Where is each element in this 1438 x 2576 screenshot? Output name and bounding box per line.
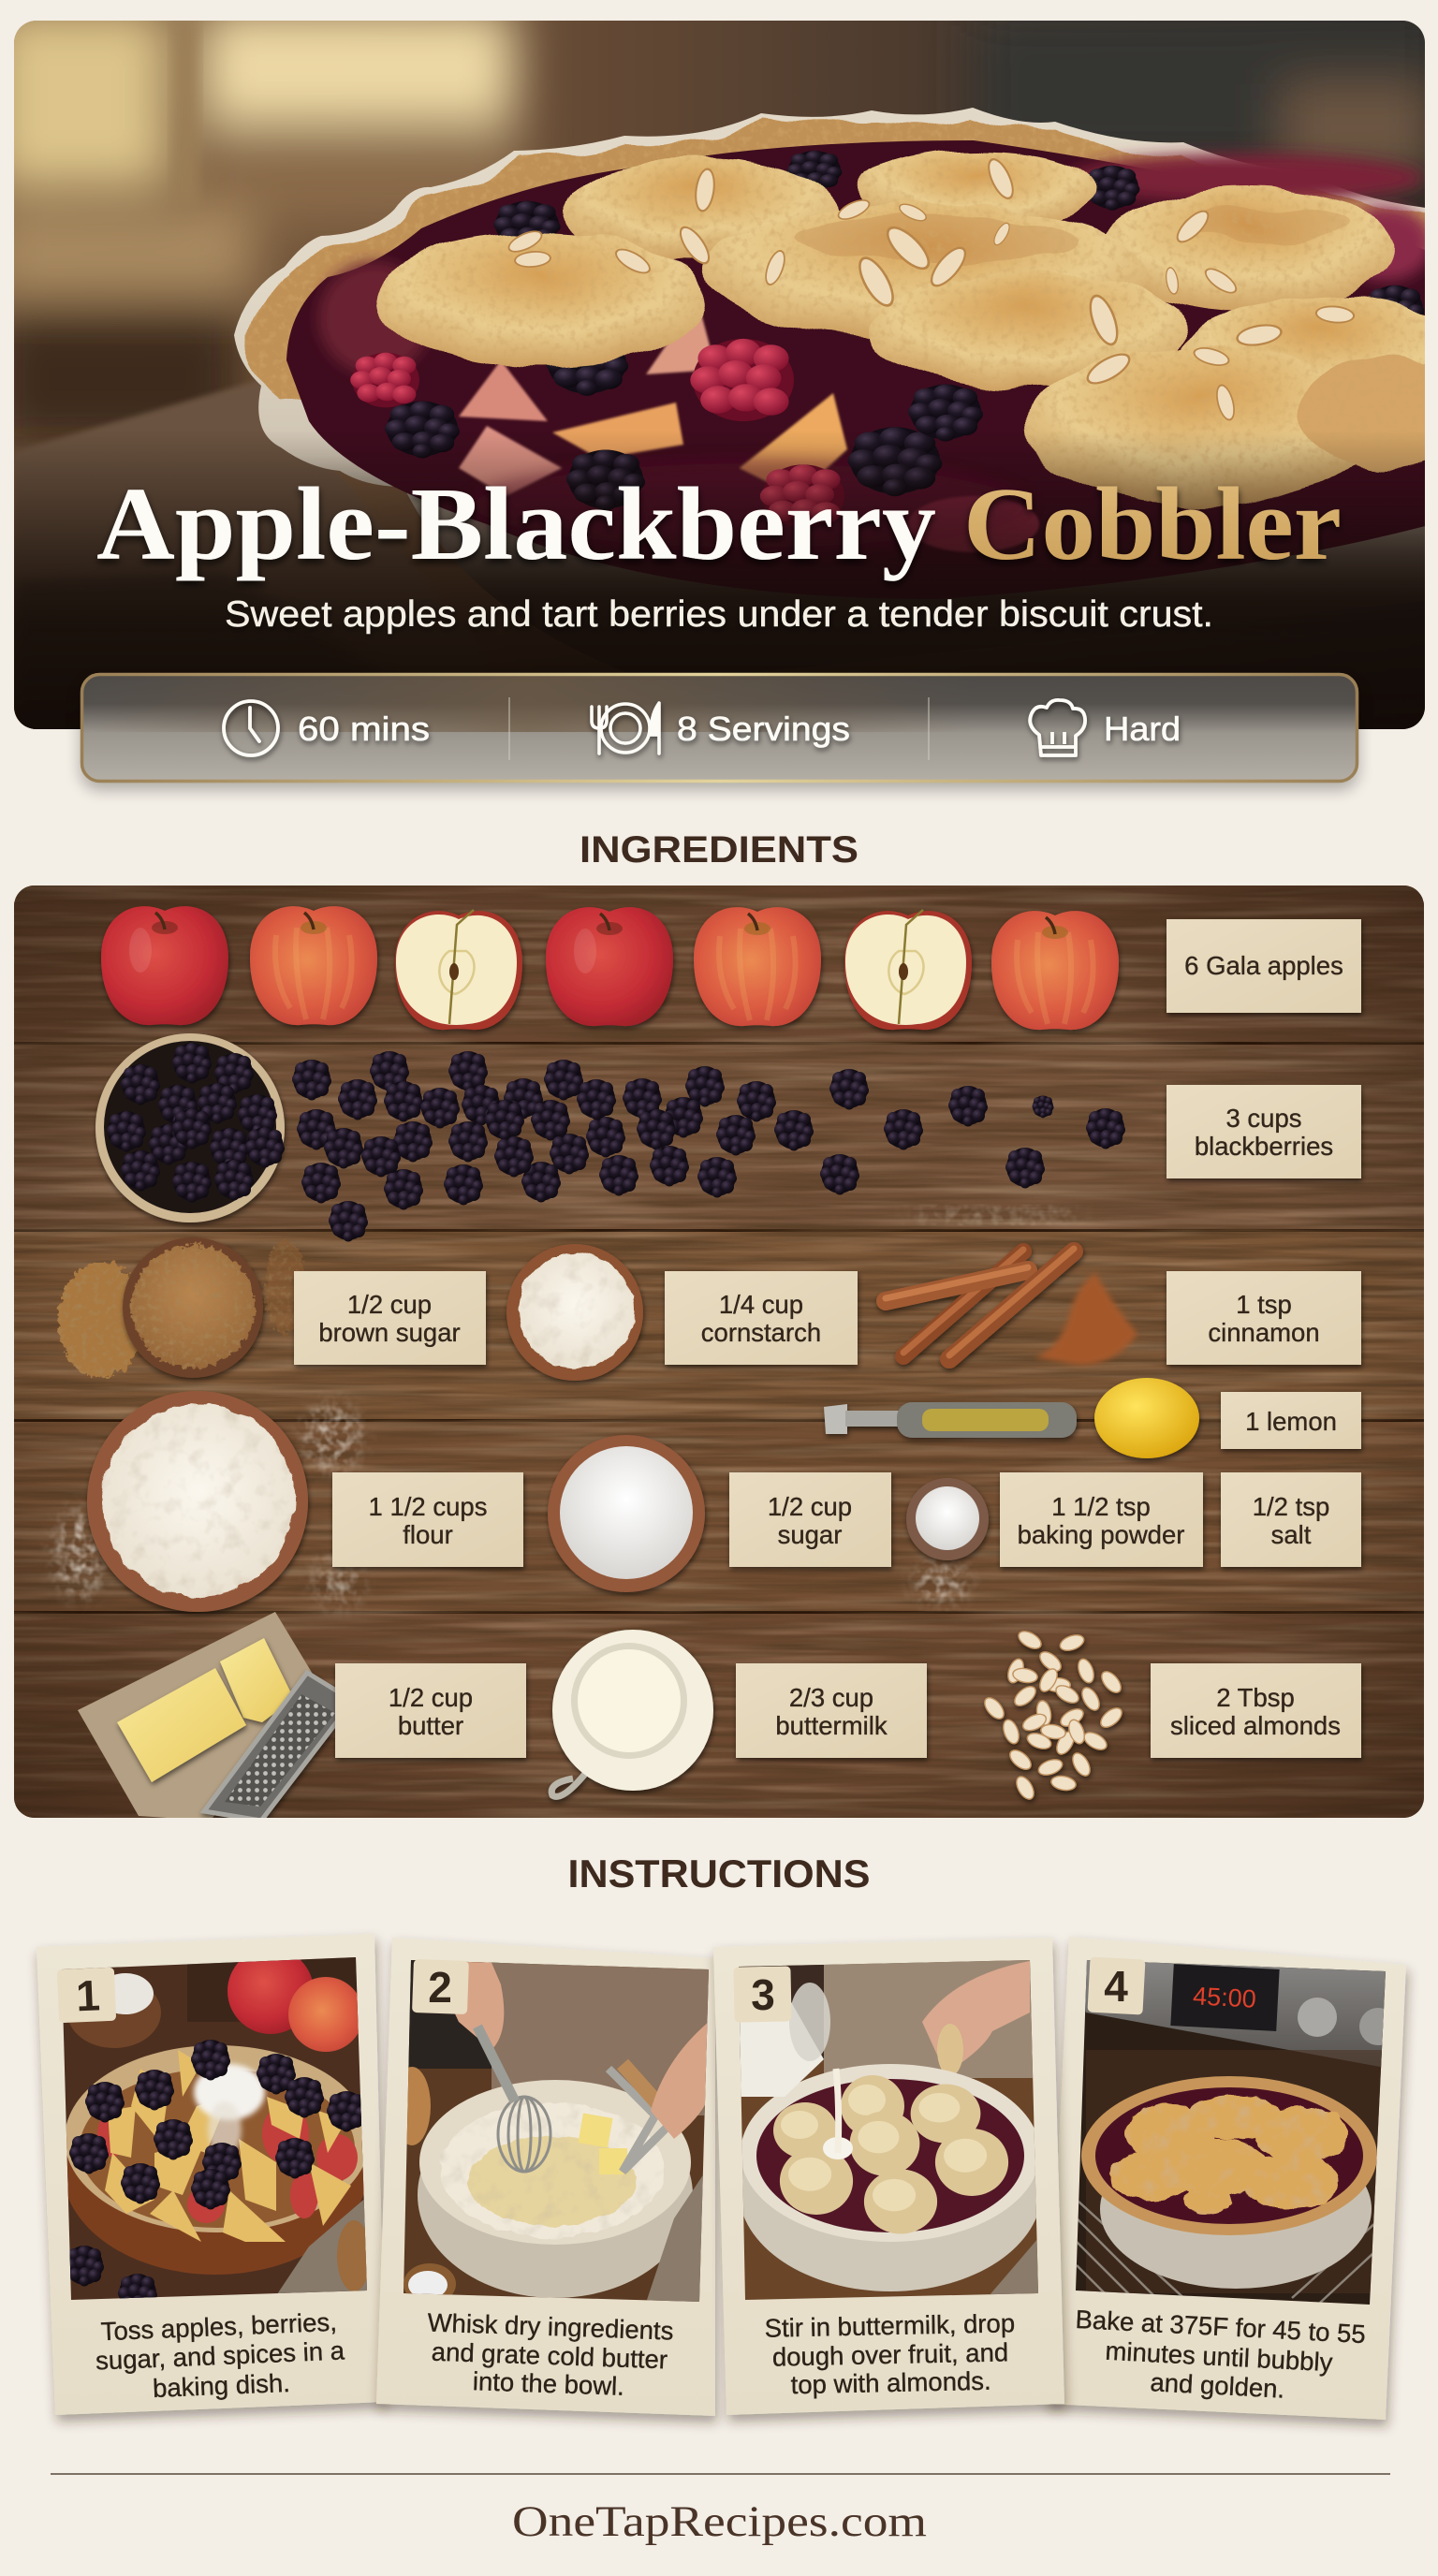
bowl of brown sugar [58, 1237, 306, 1378]
label: baking powder: baking powder [1018, 1520, 1184, 1549]
label: butter: 1/2 cup [389, 1683, 473, 1712]
label: lemon: 1 lemon [1245, 1407, 1337, 1436]
card 4 paper [1046, 1937, 1406, 2420]
label: cornstarch: cornstarch [701, 1318, 821, 1347]
step 3 text [764, 2308, 1017, 2400]
label: flour: flour [403, 1520, 453, 1549]
label: blackberries [1167, 1085, 1361, 1178]
label: baking powder [1000, 1472, 1203, 1567]
label: salt: 1/2 tsp [1253, 1492, 1329, 1521]
label: sugar: sugar [778, 1520, 842, 1549]
title: Apple-Blackberry [96, 467, 936, 582]
icon: plate and cutlery [592, 703, 659, 754]
step 4 text [1072, 2305, 1366, 2408]
sliced almonds [980, 1627, 1126, 1803]
scattered blackberries [292, 1051, 1125, 1241]
label: cinnamon: 1 tsp [1236, 1290, 1292, 1319]
card 1 paper [37, 1934, 386, 2415]
label: almonds: 2 Tbsp [1216, 1683, 1295, 1712]
title [96, 467, 1342, 582]
bowl of blackberries [95, 1033, 285, 1222]
label: sugar [729, 1472, 891, 1567]
card 2 paper [376, 1938, 715, 2416]
heading: instructions: INSTRUCTIONS [567, 1852, 871, 1895]
lemon [1094, 1378, 1199, 1458]
label: buttermilk [736, 1663, 927, 1758]
footer website: OneTapRecipes.com [512, 2497, 927, 2546]
step 1 text: baking dish. [152, 2368, 290, 2403]
label: baking powder: 1 1/2 tsp [1051, 1492, 1151, 1521]
step 3 photo [730, 1956, 1049, 2303]
step 2 text [425, 2307, 674, 2403]
title: Cobbler [963, 467, 1342, 582]
label: lemon [1221, 1392, 1361, 1449]
label: blackberries: 3 cups [1225, 1104, 1302, 1133]
step 4 number tab [1087, 1957, 1145, 2015]
step 2 photo [393, 1952, 716, 2307]
step 2 number tab: 2 [428, 1963, 452, 2012]
label: cinnamon [1167, 1271, 1361, 1365]
subtitle: Sweet apples and tart berries under a tender biscuit crust. [225, 594, 1213, 635]
step 2 text: and grate cold butter [431, 2337, 668, 2374]
pie dish [234, 108, 1425, 613]
bowl of baking powder [906, 1478, 989, 1601]
label: almonds [1151, 1663, 1361, 1758]
fruit: apple wedges [459, 300, 1039, 552]
zester [824, 1402, 1077, 1438]
step 1 text [94, 2306, 347, 2406]
label: brown sugar: brown sugar [318, 1318, 461, 1347]
bowl of cornstarch [506, 1244, 643, 1381]
label: buttermilk: buttermilk [775, 1711, 888, 1740]
heading: ingredients: INGREDIENTS [580, 829, 858, 871]
card 3 paper [713, 1938, 1064, 2415]
label: flour: 1 1/2 cups [369, 1492, 487, 1521]
almond slices [505, 154, 1356, 423]
step 2 text: into the bowl. [472, 2366, 624, 2401]
label: cinnamon: cinnamon [1208, 1318, 1320, 1347]
label: cornstarch [665, 1271, 858, 1365]
label: apples: 6 Gala apples [1184, 951, 1343, 980]
stat: time: 60 mins [298, 710, 430, 748]
label: salt: salt [1271, 1520, 1312, 1549]
fruit: berries [350, 151, 1425, 528]
step 3 number tab: 3 [751, 1970, 775, 2019]
step 4 photo [1072, 1956, 1397, 2307]
label: brown sugar [294, 1271, 486, 1365]
icon: chef hat [1030, 700, 1085, 755]
icon: clock [224, 701, 278, 755]
label: sugar: 1/2 cup [768, 1492, 852, 1521]
step 2 text: Whisk dry ingredients [427, 2307, 674, 2346]
step 2 number tab [412, 1959, 469, 2014]
step 4 text: Bake at 375F for 45 to 55 [1075, 2305, 1366, 2349]
label: salt [1221, 1472, 1361, 1567]
bowl of sugar [548, 1435, 705, 1592]
step 3 text: top with almonds. [790, 2366, 991, 2399]
stat: difficulty: Hard [1104, 710, 1181, 748]
label: butter [335, 1663, 526, 1758]
step 3 text: Stir in buttermilk, drop [764, 2308, 1015, 2343]
label: blackberries: blackberries [1195, 1132, 1333, 1161]
hero photo: cobbler [0, 9, 1438, 739]
label: cornstarch: 1/4 cup [719, 1290, 803, 1319]
step 3 number tab [733, 1966, 792, 2023]
panel: ingredients board [14, 886, 1424, 1821]
step 4 number tab: 4 [1104, 1962, 1128, 2011]
step 1 number tab: 1 [75, 1970, 101, 2020]
stat: servings: 8 Servings [677, 710, 850, 748]
label: apples [1167, 919, 1361, 1013]
jug of buttermilk [551, 1630, 713, 1796]
stats bar [81, 673, 1358, 790]
label: buttermilk: 2/3 cup [789, 1683, 873, 1712]
label: brown sugar: 1/2 cup [347, 1290, 432, 1319]
cinnamon sticks and powder [886, 1249, 1137, 1365]
step 1 text: sugar, and spices in a [95, 2335, 345, 2376]
step 4 text: and golden. [1150, 2367, 1285, 2404]
step 1 photo [56, 1948, 374, 2314]
step 1 text: Toss apples, berries, [100, 2307, 337, 2346]
step 4 oven display: 45:00 [1192, 1982, 1257, 2013]
bowl of flour [55, 1391, 361, 1612]
biscuit mounds [376, 151, 1438, 505]
label: flour [332, 1472, 523, 1567]
label: butter: butter [398, 1711, 463, 1740]
row: apples [101, 906, 1119, 1030]
step 1 number tab [57, 1968, 116, 2023]
label: almonds: sliced almonds [1170, 1711, 1341, 1740]
step 3 text: dough over fruit, and [772, 2337, 1008, 2372]
step 4 text: minutes until bubbly [1105, 2336, 1333, 2377]
butter on paper and grater [78, 1612, 353, 1821]
